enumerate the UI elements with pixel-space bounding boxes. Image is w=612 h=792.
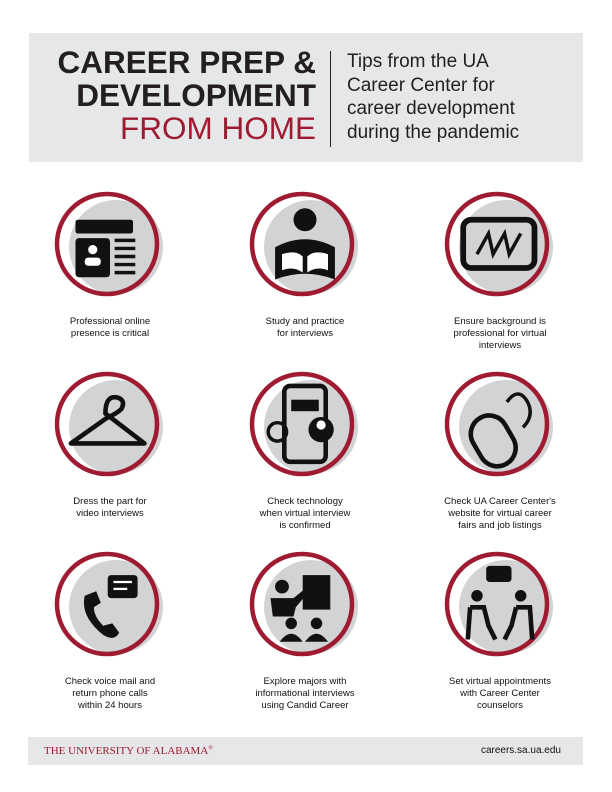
text: professional for virtual	[454, 328, 546, 339]
text: using Candid Career	[261, 700, 349, 711]
text: for interviews	[277, 328, 333, 339]
captions: presence is critical	[71, 328, 149, 339]
icon: mouse	[447, 374, 553, 474]
text: when virtual interview	[260, 508, 350, 519]
icon: phone tech	[252, 374, 358, 474]
icon: counseling	[447, 554, 553, 654]
subtitle: Career Center for	[347, 74, 495, 96]
icon: phone chat	[57, 554, 163, 654]
header panel	[29, 33, 583, 162]
subtitle: Tips from the UA	[347, 51, 489, 72]
captions	[70, 316, 150, 339]
title	[58, 44, 316, 146]
text: Check technology	[267, 496, 343, 507]
title: DEVELOPMENT	[76, 77, 316, 113]
icon: presenter	[252, 554, 358, 654]
subtitle: during the pandemic	[347, 122, 519, 142]
subtitle: career development	[347, 98, 515, 119]
text: Set virtual appointments	[449, 676, 551, 687]
text: informational interviews	[255, 688, 355, 699]
text: within 24 hours	[78, 700, 142, 711]
icon: screen	[447, 194, 553, 294]
text: is confirmed	[279, 520, 331, 531]
footer bar	[28, 737, 583, 765]
text: return phone calls	[72, 688, 148, 699]
text: fairs and job listings	[458, 520, 542, 531]
text: Check voice mail and	[65, 676, 155, 687]
text: video interviews	[76, 508, 144, 519]
footer logo text: THE UNIVERSITY OF ALABAMA®	[44, 745, 213, 757]
text: Ensure background is	[454, 316, 546, 327]
icon: profile page	[57, 194, 163, 294]
footer url: careers.sa.ua.edu	[481, 745, 561, 756]
subtitle	[347, 51, 519, 142]
text: counselors	[477, 700, 523, 711]
text: Explore majors with	[264, 676, 346, 687]
text: Dress the part for	[73, 496, 147, 507]
text: interviews	[479, 340, 521, 351]
captions: Professional online	[70, 316, 150, 327]
icon: reading person	[252, 194, 358, 294]
text: Check UA Career Center's	[444, 496, 556, 507]
text: Study and practice	[266, 316, 344, 327]
text: website for virtual career	[448, 508, 552, 519]
icon: hanger	[57, 374, 163, 474]
title: FROM HOME	[120, 110, 316, 146]
text: with Career Center	[460, 688, 540, 699]
divider	[330, 51, 331, 147]
title: CAREER PREP &	[58, 44, 316, 80]
